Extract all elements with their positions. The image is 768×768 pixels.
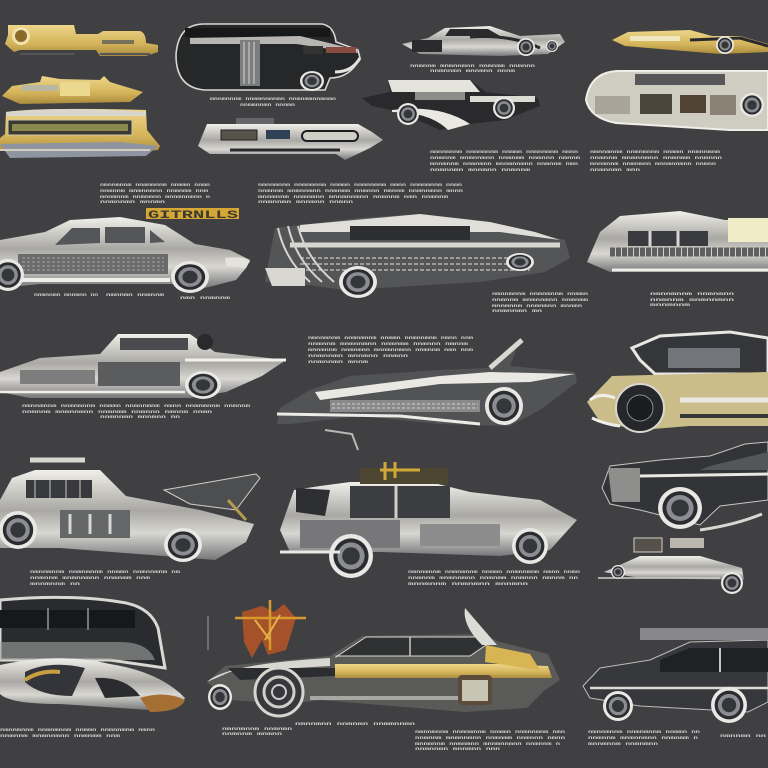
text block: row two far right: nnmnnm mnmnnmnn	[650, 298, 734, 303]
text block: row three left: nnmnnmn mnnmnn nn	[100, 415, 180, 420]
car: tiny car and labels	[598, 538, 744, 594]
text block: top centre caption	[410, 64, 535, 74]
text block: upper right left column: nmnnmnnm nnmnmnnm nnmmn nnmnnmnm nmnn	[430, 150, 578, 155]
text block: upper right left column: nnmnnm mnmnnmnn nnmnmm nnmnnn nmnnm	[430, 156, 580, 161]
text block: top van caption: nnmmnnmn nnnmn	[240, 103, 295, 108]
car: yellow second	[2, 76, 143, 104]
car: dark small top middle	[402, 26, 565, 56]
text block: bottom centre: mnnmnnm nnmnmnn mnnmnnmnn nnmnnm n	[415, 742, 560, 747]
car: black limousine bottom-left	[0, 597, 165, 668]
car: cream wagon right	[587, 211, 768, 272]
car: long silver racer	[277, 340, 577, 450]
text block: row two mid right	[492, 292, 588, 314]
car: exposed silver sedan	[265, 214, 570, 298]
text block: under sedan: nmnnmn nnmnnm	[106, 293, 164, 298]
car: black right row four	[602, 442, 768, 530]
text block: top van caption: mnnmnnnm nnmmnnmnmn nnmnmmnnmnmn	[210, 97, 336, 102]
text block: row two mid right: nnmnnm mnmnnmnn nnmnmm	[492, 298, 588, 303]
text block: row four centre	[408, 570, 580, 587]
text block: row two mid right: mnnmnnm nnmnmnn mnnmn	[492, 304, 582, 309]
car: silver classic centre	[280, 462, 577, 578]
text block: under sedan: nmn nnmnnm	[180, 296, 230, 301]
car: silver fastback	[0, 334, 286, 399]
text block: row two left: nnmnnmn mnnmn	[100, 200, 165, 205]
text block: row three centre: nnmnnm mnmnnmnn nnmnmm nnmnnn nmnnm	[308, 342, 468, 347]
text block: row two centre: nnmnnm mnmnnmnn nnmnmm nnmnnn nmnnm nnmnnmnn mnnn	[258, 189, 463, 194]
car: silver wagon with roof rack	[0, 460, 260, 562]
text block: upper right right column: mnnmnnm nnmnmnn mnnmnnmnn nnmnn	[590, 162, 716, 167]
text block: bottom centre: nmnnmnn nnmnmn nnmmnnmn	[295, 722, 415, 727]
text block: bottom right: nnmnnm mnmnnmnn nnmnmm n	[588, 736, 698, 741]
text block: bottom centre	[222, 722, 565, 752]
text block: row two centre: mnnmnnm nnmnmnn mnnmnnmnn nnmnnm nmn nnmnnm	[258, 195, 448, 200]
car: cream and black right	[587, 332, 768, 432]
car: black wagon bottom-right	[583, 628, 768, 723]
text block: upper right left column: mnnmnnm nnmnmnn mnnmnnmnn nnmnnm nmn	[430, 162, 578, 167]
text block: under sedan	[34, 293, 230, 301]
text block: upper right left column	[430, 150, 580, 173]
text block: row four left	[30, 570, 180, 587]
car: white long	[198, 118, 383, 160]
orange badge label: GITRNLLS	[148, 210, 239, 222]
text block: upper right right column: nnmnnm mnmnnmnn nnmnmm nnmnnn	[590, 156, 722, 161]
text block: bottom centre: nnmnnm mnmnnmnn nnmnmm nnmnnn nmnn	[415, 736, 565, 741]
text block: bottom right: mnnmnnm nnmnmnn	[588, 742, 658, 747]
text block: row four centre: nmnnmnnm nnmnmnnm nnmmn nnmnnmnm nmnn nnmn	[408, 570, 580, 575]
text block: row two far right: nmnnmnnm nnmnmnn	[650, 292, 734, 297]
text block: bottom right: nmnnmnnm nnmnmnnm nnmmn nn	[588, 730, 700, 735]
text block: row two left: nnmnnm mnmnnmnn nnmnmm nnm	[100, 189, 208, 194]
text block: row two centre: nmnnmnnm nnmnmnnm nnmmn nnmnnmnm nmnn nnmnmnnm nnmn	[258, 183, 462, 188]
text block: top van caption	[210, 97, 336, 108]
car: black and gold sedan	[207, 608, 560, 716]
text block: row four left: nmnnmnnm nnmnmnnm nnmmn nnmnnmnm nm	[30, 570, 180, 575]
car: curved silver front	[0, 658, 185, 712]
text block: bottom centre: nmnnmnnm nnmnmn	[222, 727, 292, 732]
orange badge label	[146, 208, 239, 222]
text block: bottom centre: nmnnmnnm nnmnmnnm nnmmn nnmnnmnm nmn	[415, 730, 565, 735]
text block: row four left: nnmnnm mnmnnmnn nnmnmm nnm	[30, 576, 150, 581]
text block: bottom left: nnmnnm mnmnnmnn nnmnmm nnm	[0, 734, 120, 739]
car: yellow top-left	[5, 25, 158, 56]
car: black and white coupe	[362, 80, 540, 130]
text block: bottom left: nmnnmnnm nnmnmnnm nnmmn nnmnnmnm nmnn	[0, 728, 155, 733]
text block: row four centre: mnnmnnm nnmnmnn mnnmnn	[408, 582, 528, 587]
text block: row three centre: nnmnnmn mnnm	[308, 360, 368, 365]
car: silver dashboard	[586, 71, 768, 130]
text block: row two mid right: nnmnnmn mn	[492, 309, 542, 314]
text block: row four centre: nnmnnm mnmnnmnn nnmnmm nnmnnn nmnnm nn	[408, 576, 578, 581]
text block: row three centre: nnmnnmn mnnmnn nnmnn	[308, 354, 408, 359]
text block: bottom left	[0, 728, 155, 739]
text block: row three left	[22, 404, 250, 420]
text block: upper right left column: nnmnnmn mnnmnn nnmnnm	[430, 168, 530, 173]
text block: under sedan: nnmnnmn mnnmnn nn	[34, 293, 98, 298]
text block: bottom centre: nnmnnmn mnnmnn nnn	[415, 747, 500, 752]
text block: row three left: nmnnmnnm nnmnmnnm nnmmn nnmnnmnm nmnn nnmnmnnm nnmnnm	[22, 404, 250, 409]
text block: upper right right column: nnmnnmn mnn	[590, 168, 640, 173]
text block: row four left: mnnmnnm nn	[30, 582, 80, 587]
text block: row two centre	[258, 183, 463, 205]
text block: row two left	[100, 183, 210, 205]
text block: row two left: mnnmnnm nnmnmnn mnnmnnmnn n	[100, 195, 210, 200]
text block: row two mid right: nmnnmnnm nnmnmnnm nnmmn	[492, 292, 588, 297]
icon: orange ornament	[208, 600, 306, 658]
text block: upper right right column	[590, 150, 722, 173]
text block: row two left: nmnnmnnm nnmnmnnm nnmmn nnmn	[100, 183, 210, 188]
car: yellow small top right	[612, 30, 768, 54]
text block: top centre caption: nnmnnmn mnnmnn nnnm	[430, 69, 515, 74]
car: black van	[176, 24, 360, 91]
text block: row two far right: mnnmnnm	[650, 303, 690, 308]
text block: bottom right: nmnnmn nn	[720, 734, 766, 739]
text block: bottom centre: nnmnnm mnmnn	[222, 732, 282, 737]
car: silver sedan	[0, 217, 250, 293]
text block: row three centre	[308, 336, 473, 365]
text block: row three centre: mnnmnnm nnmnmnn mnnmnnmnn nnmnnm nmn nnm	[308, 348, 473, 353]
text block: row two centre: nnmnnmn mnnmnn nnmnn	[258, 200, 353, 205]
text block: row three centre: nmnnmnnm nnmnmnnm nnmmn nnmnnmnm nmnn nnm	[308, 336, 473, 341]
text block: upper right right column: nmnnmnnm nnmnmnnm nnmmn nnmnnmnm	[590, 150, 720, 155]
text block: row two far right	[650, 292, 734, 308]
text block: row three left: nnmnnm mnmnnmnn nnmnmm nnmnnn nmnnm nnmn	[22, 410, 212, 415]
text block: top centre caption: nnmnnm mnmnnmnn nnmnmm nnmnnn	[410, 64, 535, 69]
text block: bottom right	[588, 730, 766, 747]
car: yellow dashboard	[0, 109, 160, 158]
